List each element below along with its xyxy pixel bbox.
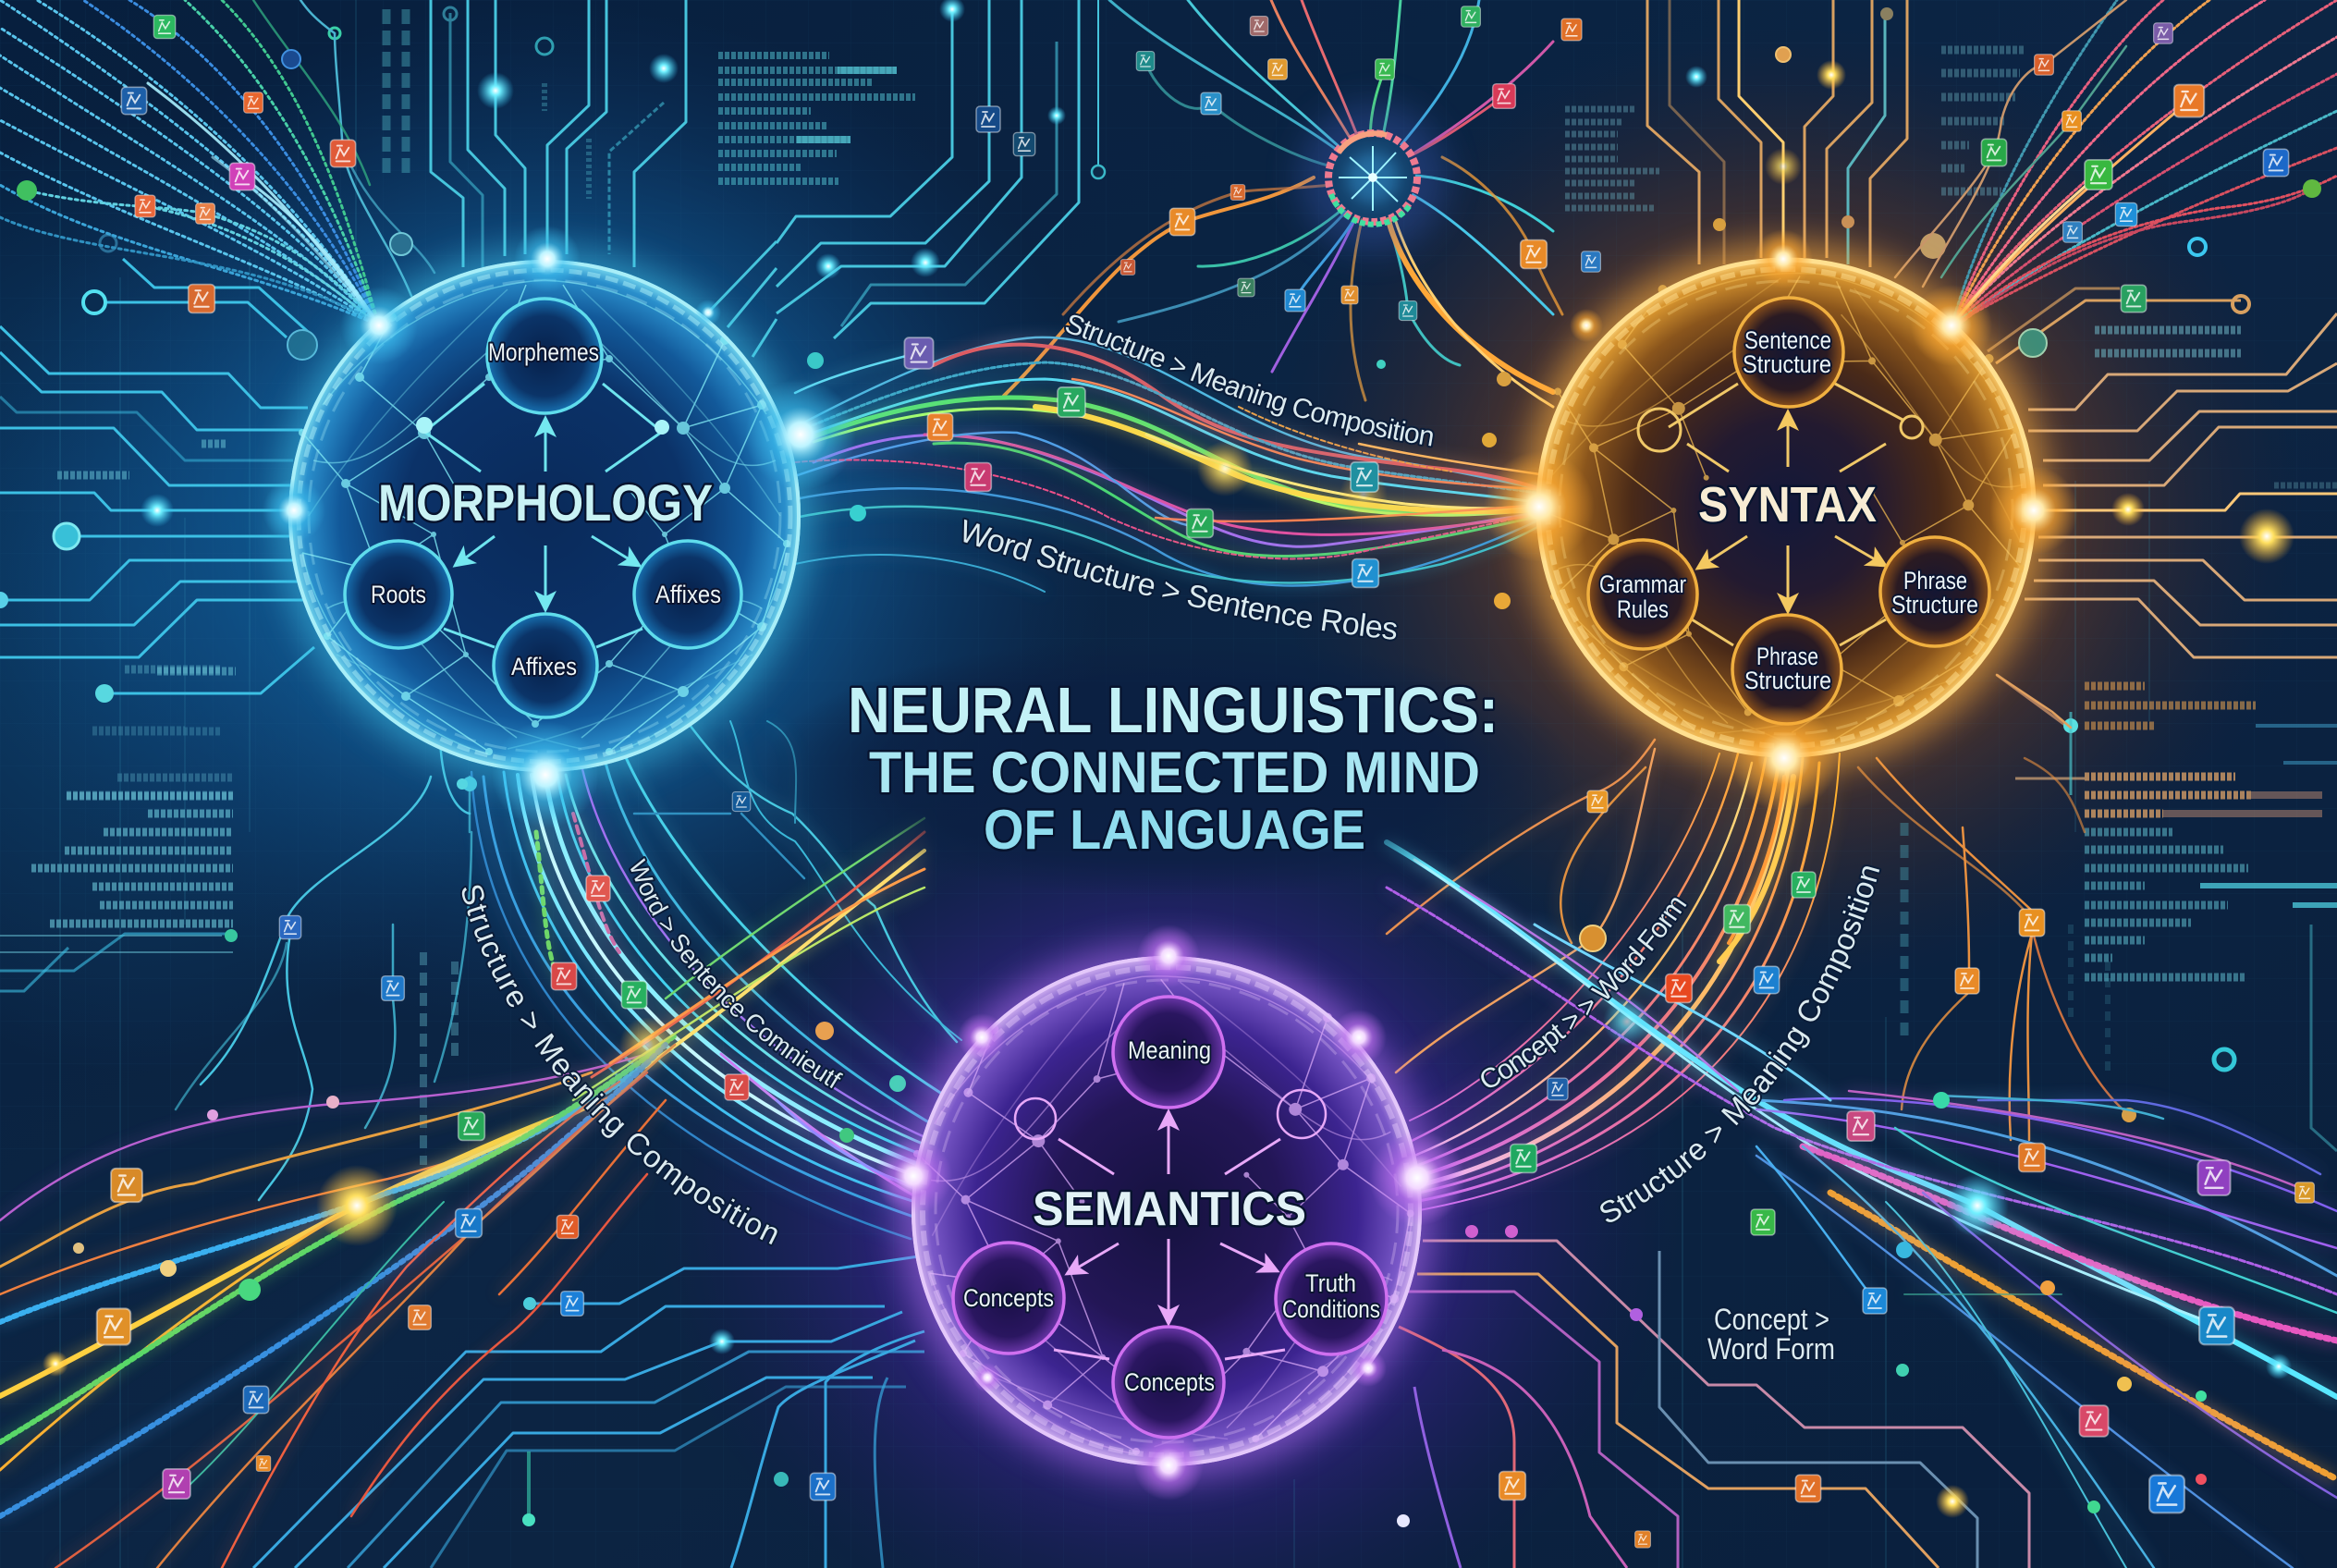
morphology side branches bbox=[176, 740, 906, 1200]
fibre bundle: lower right crossing bbox=[1387, 842, 2337, 1568]
node: concepts bottom: Concepts bbox=[1124, 1368, 1215, 1396]
icon: tile bbox=[2115, 202, 2137, 227]
icon: tile bbox=[1666, 974, 1692, 1002]
sphere rim bbox=[290, 262, 799, 770]
title: THE CONNECTED MIND bbox=[869, 741, 1480, 805]
node: truth conditions bbox=[1276, 1243, 1387, 1354]
icon: tile bbox=[927, 413, 953, 441]
circuit nodes: semantics lower left bbox=[522, 1297, 789, 1526]
icon: badge bbox=[390, 233, 412, 255]
icon: tile bbox=[2035, 55, 2053, 75]
fibre bundle: morphology to syntax bbox=[795, 337, 1553, 592]
icon: tile bbox=[189, 285, 214, 312]
icon: tile bbox=[1120, 260, 1135, 275]
icon: tile bbox=[561, 1292, 583, 1316]
link label: concept to word form curved: Concept > > Word Form bbox=[1479, 896, 1688, 1089]
node: grammar rules bbox=[1588, 540, 1697, 649]
icon: tile bbox=[557, 1215, 579, 1239]
node: phrase structure right: Structure bbox=[1891, 591, 1978, 619]
icon: tile bbox=[2154, 23, 2172, 43]
node: meaning bbox=[1113, 997, 1224, 1108]
icon: tile bbox=[97, 1308, 130, 1345]
neuron hub fibres bbox=[1004, 0, 1562, 407]
icon: tile bbox=[409, 1305, 431, 1329]
sphere flares: morphology bbox=[263, 226, 856, 828]
fibre bundle: morphology to upper left bbox=[0, 0, 434, 325]
fibre bundle: lower left crossing bbox=[0, 818, 924, 1568]
icon: tile bbox=[965, 463, 991, 491]
icon: tile bbox=[1792, 872, 1816, 898]
circuit traces: syntax top bbox=[1647, 0, 2241, 363]
heading: syntax: SYNTAX bbox=[1698, 477, 1877, 533]
sphere body bbox=[1536, 258, 2036, 757]
icon: tile bbox=[1635, 1531, 1650, 1548]
node: affixes right bbox=[634, 541, 741, 648]
sphere: syntax bbox=[1510, 239, 2062, 778]
data readouts: lower left bbox=[0, 444, 455, 1165]
icon: tile bbox=[2199, 1307, 2234, 1344]
node: affixes right: Affixes bbox=[655, 581, 721, 608]
neural web bbox=[299, 280, 790, 755]
neuron hub bbox=[1299, 104, 1447, 251]
icon: tile bbox=[1955, 968, 1979, 994]
icon: tile bbox=[1250, 17, 1268, 35]
node: phrase structure right bbox=[1880, 537, 1989, 646]
sphere body bbox=[288, 260, 801, 772]
icon: tile bbox=[279, 915, 301, 939]
icon: blob bbox=[2303, 179, 2321, 198]
icon: tile bbox=[1201, 92, 1221, 115]
icon: tile bbox=[2121, 285, 2147, 312]
icon: tile bbox=[2063, 222, 2082, 242]
icon: tile bbox=[1751, 1209, 1775, 1235]
sphere rim bbox=[913, 958, 1420, 1464]
icon: tile bbox=[1352, 559, 1378, 587]
icon: tile bbox=[459, 1112, 484, 1140]
fibre bundle: morphology to semantics bbox=[471, 721, 961, 1239]
node: sentence structure bbox=[1734, 298, 1843, 407]
node: sentence structure: Sentence bbox=[1744, 326, 1831, 354]
icon: tile bbox=[1511, 1145, 1536, 1172]
icon: tile bbox=[2263, 149, 2289, 177]
morphology to semantics glow bbox=[471, 721, 961, 1239]
node: phrase structure bottom bbox=[1732, 615, 1841, 724]
icon: tile bbox=[1238, 278, 1254, 297]
node: phrase structure bottom: Phrase bbox=[1756, 643, 1818, 670]
circuit traces: syntax right bbox=[1997, 313, 2337, 778]
icon: tile bbox=[1981, 139, 2007, 166]
fibre bundle: semantics to syntax bbox=[1387, 740, 1840, 1211]
icon: tile bbox=[456, 1209, 482, 1237]
icon: tile bbox=[976, 106, 1000, 132]
morphology to syntax hot spots bbox=[807, 352, 1511, 609]
circuit traces: semantics lower left bbox=[253, 1256, 924, 1568]
sphere rim bbox=[1538, 260, 2034, 755]
sphere: morphology bbox=[276, 248, 813, 784]
circuit traces: morphology top bbox=[431, 0, 1098, 357]
node: phrase structure right: Phrase bbox=[1903, 567, 1967, 594]
icon: tile bbox=[1230, 185, 1245, 200]
link label: concept to word form: Concept > bbox=[1714, 1303, 1829, 1336]
neural web bbox=[898, 951, 1437, 1475]
icon: tile bbox=[2019, 1144, 2045, 1171]
icon: tile bbox=[1136, 52, 1155, 70]
sphere flares: semantics bbox=[875, 925, 1465, 1501]
icon: tile bbox=[725, 1074, 749, 1100]
icon: tile bbox=[121, 87, 147, 115]
fibre bundle: syntax to upper right bbox=[1895, 0, 2337, 325]
circuit nodes: syntax top bbox=[1685, 7, 2249, 357]
icon: tile bbox=[243, 1386, 269, 1414]
lower right crossing hot spots bbox=[1603, 998, 2292, 1513]
link label: structure to meaning composition top: Structure > Meaning Composition bbox=[1064, 312, 1435, 447]
circuit nodes: syntax right bbox=[2063, 493, 2337, 1151]
icon: tile bbox=[244, 92, 263, 113]
node: sentence structure: Structure bbox=[1743, 350, 1831, 378]
icon: tile bbox=[2085, 160, 2112, 190]
icon: tile bbox=[153, 15, 176, 39]
semantics to syntax glow bbox=[1387, 740, 1840, 1211]
icon: tile bbox=[1561, 18, 1582, 41]
icon: tile bbox=[1285, 289, 1305, 312]
icon: tile bbox=[1268, 59, 1287, 80]
link label: word structure to sentence roles: Word Structure > Sentence Roles bbox=[961, 518, 1398, 642]
icon: tile bbox=[1548, 1078, 1568, 1100]
title: NEURAL LINGUISTICS: bbox=[848, 674, 1499, 746]
node: concepts left: Concepts bbox=[963, 1284, 1054, 1312]
data readouts: top left bbox=[86, 0, 915, 199]
icon: tile bbox=[1351, 462, 1378, 492]
node: affixes bottom: Affixes bbox=[511, 653, 577, 680]
icon: tile bbox=[163, 1469, 190, 1499]
icon: tile bbox=[621, 981, 647, 1009]
node: concepts left bbox=[953, 1243, 1064, 1354]
connector arrows bbox=[1638, 384, 1923, 645]
icon: tile bbox=[2019, 909, 2045, 937]
link label: concept to word form bbox=[1707, 1303, 1835, 1366]
node: grammar rules: Rules bbox=[1617, 595, 1669, 623]
icon: tile bbox=[1493, 84, 1515, 108]
icon: tile bbox=[1582, 251, 1600, 272]
icon: tile bbox=[586, 876, 610, 901]
icon: tile bbox=[1341, 286, 1358, 304]
data readouts: top right bbox=[1565, 50, 2337, 485]
link label: structure to meaning composition right: Structure > Meaning Composition bbox=[1598, 864, 1882, 1224]
node: grammar rules: Grammar bbox=[1599, 570, 1686, 598]
data readouts: lower right bbox=[1904, 686, 2337, 1072]
node: truth conditions: Conditions bbox=[1282, 1295, 1380, 1323]
icon: tile bbox=[2149, 1476, 2184, 1513]
icon: tile bbox=[1399, 301, 1417, 320]
sphere: semantics bbox=[898, 943, 1437, 1479]
node: concepts bottom bbox=[1113, 1327, 1224, 1438]
node: morphemes: Morphemes bbox=[488, 338, 599, 366]
icon: tile bbox=[904, 337, 934, 369]
icon: tile bbox=[810, 1473, 836, 1501]
syntax lower right branches bbox=[1858, 675, 2136, 1140]
circuit nodes: morphology left bbox=[0, 291, 317, 942]
icon: tile bbox=[1754, 966, 1780, 994]
icon: tile bbox=[382, 976, 404, 1000]
node: truth conditions: Truth bbox=[1305, 1269, 1356, 1297]
circuit nodes: morphology top bbox=[100, 0, 1105, 279]
icon: tile bbox=[2079, 1405, 2109, 1437]
icon: badge bbox=[1580, 925, 1606, 951]
icon: tile bbox=[2174, 85, 2204, 116]
icon: tile bbox=[1376, 59, 1394, 80]
node: phrase structure bottom: Structure bbox=[1744, 667, 1831, 694]
icon: tile bbox=[1795, 1475, 1821, 1502]
icon: tile bbox=[1587, 790, 1608, 813]
sphere body bbox=[912, 956, 1422, 1466]
icon: tile bbox=[1462, 6, 1480, 27]
icon: tile bbox=[1863, 1288, 1887, 1314]
icon: tile bbox=[1521, 240, 1547, 268]
icon: tile bbox=[111, 1169, 142, 1202]
title: OF LANGUAGE bbox=[984, 799, 1365, 861]
connector arrows bbox=[1015, 1090, 1326, 1359]
circuit traces: morphology left bbox=[0, 259, 314, 1193]
icon: tile bbox=[135, 195, 155, 217]
link label: structure to meaning composition left: Structure > Meaning Composition bbox=[460, 884, 778, 1246]
node: affixes bottom bbox=[494, 614, 597, 717]
circuit nodes: semantics lower right bbox=[1397, 1225, 1969, 1527]
icon: tile bbox=[1058, 387, 1085, 417]
icon: tile bbox=[256, 1456, 271, 1471]
icon: tile bbox=[196, 203, 214, 224]
icon: tile bbox=[1187, 509, 1213, 537]
link label: concept to word form: Word Form bbox=[1707, 1332, 1835, 1366]
icon: tile bbox=[2062, 111, 2081, 131]
icon: tile bbox=[1499, 1472, 1525, 1500]
icon: tile bbox=[1847, 1111, 1875, 1141]
icon: tile bbox=[1169, 208, 1195, 236]
fibre glow bbox=[795, 337, 1553, 592]
node: roots bbox=[345, 541, 452, 648]
icon: blob bbox=[17, 180, 37, 201]
icon: tile bbox=[732, 791, 751, 812]
circuit traces: semantics lower right bbox=[1399, 1241, 2029, 1568]
icon: tile bbox=[330, 140, 356, 167]
icon: tile bbox=[2197, 1160, 2231, 1195]
icon: tile bbox=[551, 962, 577, 990]
icon: tile bbox=[229, 163, 255, 190]
link label: word to sentence: Word > Sentence Comnieutf bbox=[629, 856, 845, 1091]
node: meaning: Meaning bbox=[1128, 1036, 1211, 1064]
node: morphemes bbox=[487, 299, 602, 413]
title bbox=[763, 638, 1576, 897]
icon: tile bbox=[1724, 905, 1750, 933]
heading: semantics: SEMANTICS bbox=[1033, 1182, 1306, 1236]
icon: tile bbox=[1013, 132, 1035, 156]
heading: morphology: MORPHOLOGY bbox=[378, 473, 713, 532]
lower left crossing glow bbox=[0, 818, 924, 1568]
connector arrows bbox=[416, 384, 669, 647]
icon: badge bbox=[282, 50, 300, 68]
lower left crossing hot spots bbox=[43, 1017, 675, 1377]
lower right crossing glow bbox=[1387, 842, 2337, 1568]
neural web bbox=[1510, 239, 2062, 778]
icon: tile bbox=[2295, 1182, 2314, 1203]
sphere flares: syntax bbox=[1484, 229, 2078, 812]
node: roots: Roots bbox=[371, 581, 426, 608]
